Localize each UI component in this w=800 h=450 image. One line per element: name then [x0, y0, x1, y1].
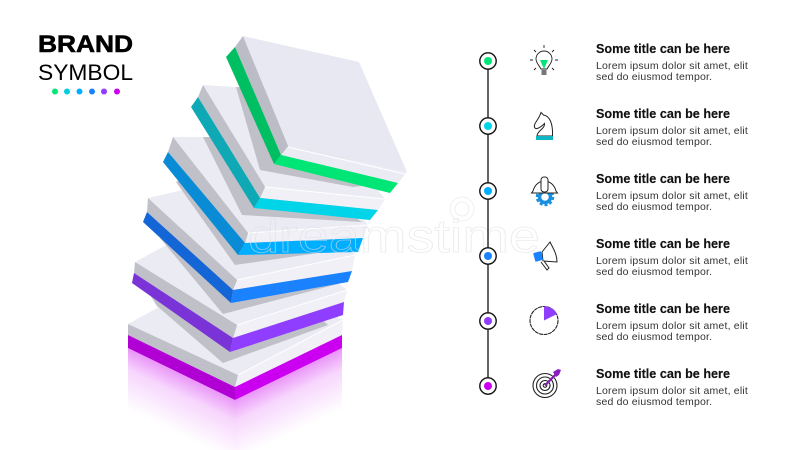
body 4: Lorem ipsum dolor sit amet, elit	[596, 255, 748, 267]
timeline	[480, 53, 496, 394]
body 6: sed do eiusmod tempor.	[596, 396, 712, 408]
body 6: Lorem ipsum dolor sit amet, elit	[596, 385, 748, 397]
body 3: Lorem ipsum dolor sit amet, elit	[596, 190, 748, 202]
title 6: Some title can be here	[596, 366, 730, 381]
text block 6	[596, 366, 748, 408]
timeline nodes	[480, 53, 496, 394]
layer 1 green	[226, 36, 407, 193]
layer 5 purple	[132, 205, 347, 352]
layer 3 sky blue	[163, 137, 368, 255]
layer 6 magenta	[128, 268, 343, 400]
body 5: Lorem ipsum dolor sit amet, elit	[596, 320, 748, 332]
body 2: sed do eiusmod tempor.	[596, 136, 712, 148]
title 1: Some title can be here	[596, 41, 730, 56]
body 3: sed do eiusmod tempor.	[596, 201, 712, 213]
icon: helmet and gear	[532, 177, 558, 205]
title 4: Some title can be here	[596, 236, 730, 251]
floor reflection	[128, 348, 342, 450]
icon: target	[533, 369, 561, 398]
icon: clock chart	[530, 306, 558, 334]
timeline line	[487, 61, 489, 386]
layer 4 blue	[143, 170, 355, 303]
icon: light bulb	[530, 45, 558, 75]
title 2: Some title can be here	[596, 106, 730, 121]
brand name: BRAND	[38, 31, 133, 58]
text block 3	[596, 171, 748, 213]
body 2: Lorem ipsum dolor sit amet, elit	[596, 125, 748, 137]
watermark	[248, 197, 540, 262]
text block 2	[596, 106, 748, 148]
body 4: sed do eiusmod tempor.	[596, 266, 712, 278]
title 5: Some title can be here	[596, 301, 730, 316]
watermark: dreamstime	[248, 210, 540, 262]
body 1: sed do eiusmod tempor.	[596, 71, 712, 83]
text block 1	[596, 41, 748, 83]
icon: chess knight	[534, 112, 553, 140]
timeline dots	[484, 57, 492, 390]
title 3: Some title can be here	[596, 171, 730, 186]
body 1: Lorem ipsum dolor sit amet, elit	[596, 60, 748, 72]
layer 2 cyan	[191, 85, 385, 220]
text block 5	[596, 301, 748, 343]
body 5: sed do eiusmod tempor.	[596, 331, 712, 343]
brand logo	[38, 31, 133, 94]
stacked layers chart	[128, 36, 407, 450]
brand colour dots	[52, 88, 120, 94]
brand symbol word: SYMBOL	[38, 60, 133, 85]
text block 4	[596, 236, 748, 278]
icon: megaphone	[533, 242, 557, 270]
